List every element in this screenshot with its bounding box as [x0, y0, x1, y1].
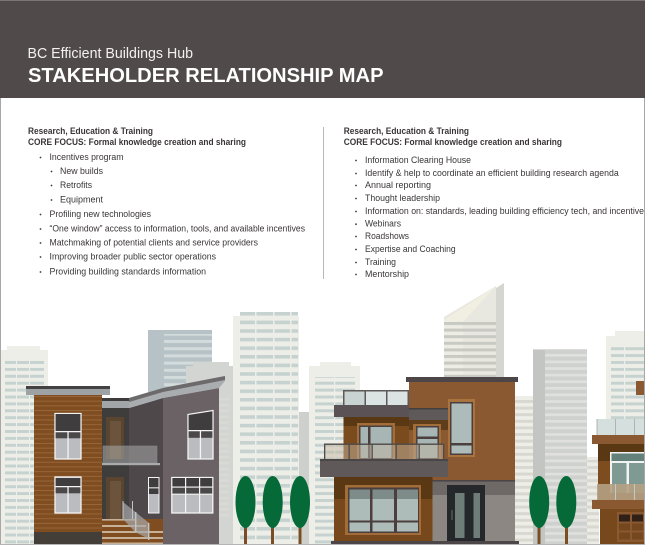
right column bullet list: Identify & help to coordinate an efficient building research agenda — [365, 168, 619, 179]
tower: behind right — [514, 396, 534, 545]
left column bullet list: “One window” access to information, tools, and available incentives — [50, 224, 305, 234]
picture window — [345, 485, 421, 535]
right column heading: Research, Education & Training — [344, 126, 469, 137]
right wall — [163, 388, 219, 545]
left column heading — [28, 126, 246, 148]
window: narrow — [148, 478, 159, 513]
header banner — [0, 0, 645, 98]
left column bullet list — [40, 152, 305, 278]
brown clad block — [34, 395, 102, 545]
right column bullet list: Annual reporting — [365, 180, 431, 191]
tree row: left — [236, 476, 310, 545]
house: right edge — [592, 381, 645, 545]
tower: low strip — [587, 457, 599, 545]
terrace slab — [334, 405, 409, 417]
tall window — [448, 399, 475, 457]
garage window — [617, 512, 645, 542]
upper brown fragment — [636, 381, 645, 395]
window: grey wall wide — [172, 478, 213, 513]
window: grey wall upper — [188, 410, 213, 459]
tower: far left — [0, 346, 48, 545]
right column bullet list: Thought leadership — [365, 193, 440, 204]
tower: tall centre-left — [233, 312, 299, 545]
window: brown lower — [55, 477, 81, 513]
tower: far right — [606, 331, 645, 466]
tree 2 — [263, 476, 283, 545]
glass balcony — [102, 446, 160, 465]
right column bullet list: Roadshows — [365, 231, 409, 242]
wall — [598, 444, 645, 500]
upper glass railing — [596, 419, 645, 435]
tower: narrow grey — [299, 412, 310, 545]
right column heading: CORE FOCUS: Formal knowledge creation and sharing — [344, 137, 562, 148]
shaded band — [409, 420, 448, 430]
flat roof — [26, 386, 110, 395]
roof terrace railing — [343, 390, 409, 406]
right column bullet list: Mentorship — [365, 269, 409, 280]
middle wall — [129, 398, 163, 532]
flat roof — [406, 377, 518, 382]
tower: pale grey — [186, 362, 237, 545]
house: centre modern brown — [320, 377, 519, 545]
house: left grey and brown duplex — [26, 376, 225, 545]
tree 1 — [236, 476, 256, 545]
subtitle: BC Efficient Buildings Hub — [28, 45, 193, 62]
right column bullet list: Webinars — [365, 219, 401, 230]
right column bullet list — [355, 155, 644, 280]
left text column — [28, 126, 305, 278]
left column bullet list: Equipment — [60, 194, 103, 206]
tower: angled spire — [444, 283, 504, 545]
window — [610, 452, 645, 493]
right text column — [344, 126, 644, 280]
lower slab — [592, 500, 645, 509]
small window — [413, 424, 441, 460]
lower glass railing — [597, 484, 645, 500]
recessed entry — [102, 400, 129, 532]
left column heading: CORE FOCUS: Formal knowledge creation and sharing — [28, 137, 246, 148]
right column heading — [344, 126, 562, 148]
left column heading: Research, Education & Training — [28, 126, 153, 137]
right column bullet list: Training — [365, 257, 396, 268]
upper main block — [409, 382, 515, 481]
ground floor brown wall — [334, 477, 432, 541]
mid band — [409, 408, 448, 420]
lower door — [106, 477, 124, 522]
right column bullet list: Information Clearing House — [365, 155, 471, 166]
left column bullet list: Matchmaking of potential clients and service providers — [50, 238, 258, 248]
left column bullet list: Incentives program — [50, 152, 124, 163]
title: STAKEHOLDER RELATIONSHIP MAP — [28, 64, 384, 87]
balcony glass railing — [324, 444, 444, 459]
foundation slab — [331, 541, 519, 545]
front door — [447, 485, 485, 541]
right column bullet list: Expertise and Coaching — [365, 244, 456, 255]
lower wall — [600, 509, 645, 545]
left column bullet list: Retrofits — [60, 180, 92, 191]
sloped roof — [129, 376, 225, 408]
tower: blue-grey — [148, 330, 212, 400]
tower: centre — [309, 362, 360, 545]
upper left window — [357, 423, 395, 459]
window: brown upper — [55, 414, 81, 459]
tree 4 — [529, 476, 549, 545]
tree 3 — [290, 476, 310, 545]
left column bullet list: Improving broader public sector operations — [50, 252, 216, 262]
tower: grey right — [533, 349, 587, 545]
skyline background towers — [0, 283, 645, 545]
tree 5 — [556, 476, 576, 545]
left column bullet list: Profiling new technologies — [50, 209, 151, 220]
upper left block — [344, 417, 409, 459]
upper door — [106, 417, 124, 459]
entry stairs — [102, 501, 163, 545]
ground floor grey wall — [432, 480, 515, 542]
upper slab — [592, 435, 645, 444]
balcony slab — [320, 459, 448, 477]
tree row: right — [529, 476, 576, 545]
left column bullet list: Providing building standards information — [50, 266, 206, 278]
left column bullet list: New builds — [60, 166, 103, 177]
